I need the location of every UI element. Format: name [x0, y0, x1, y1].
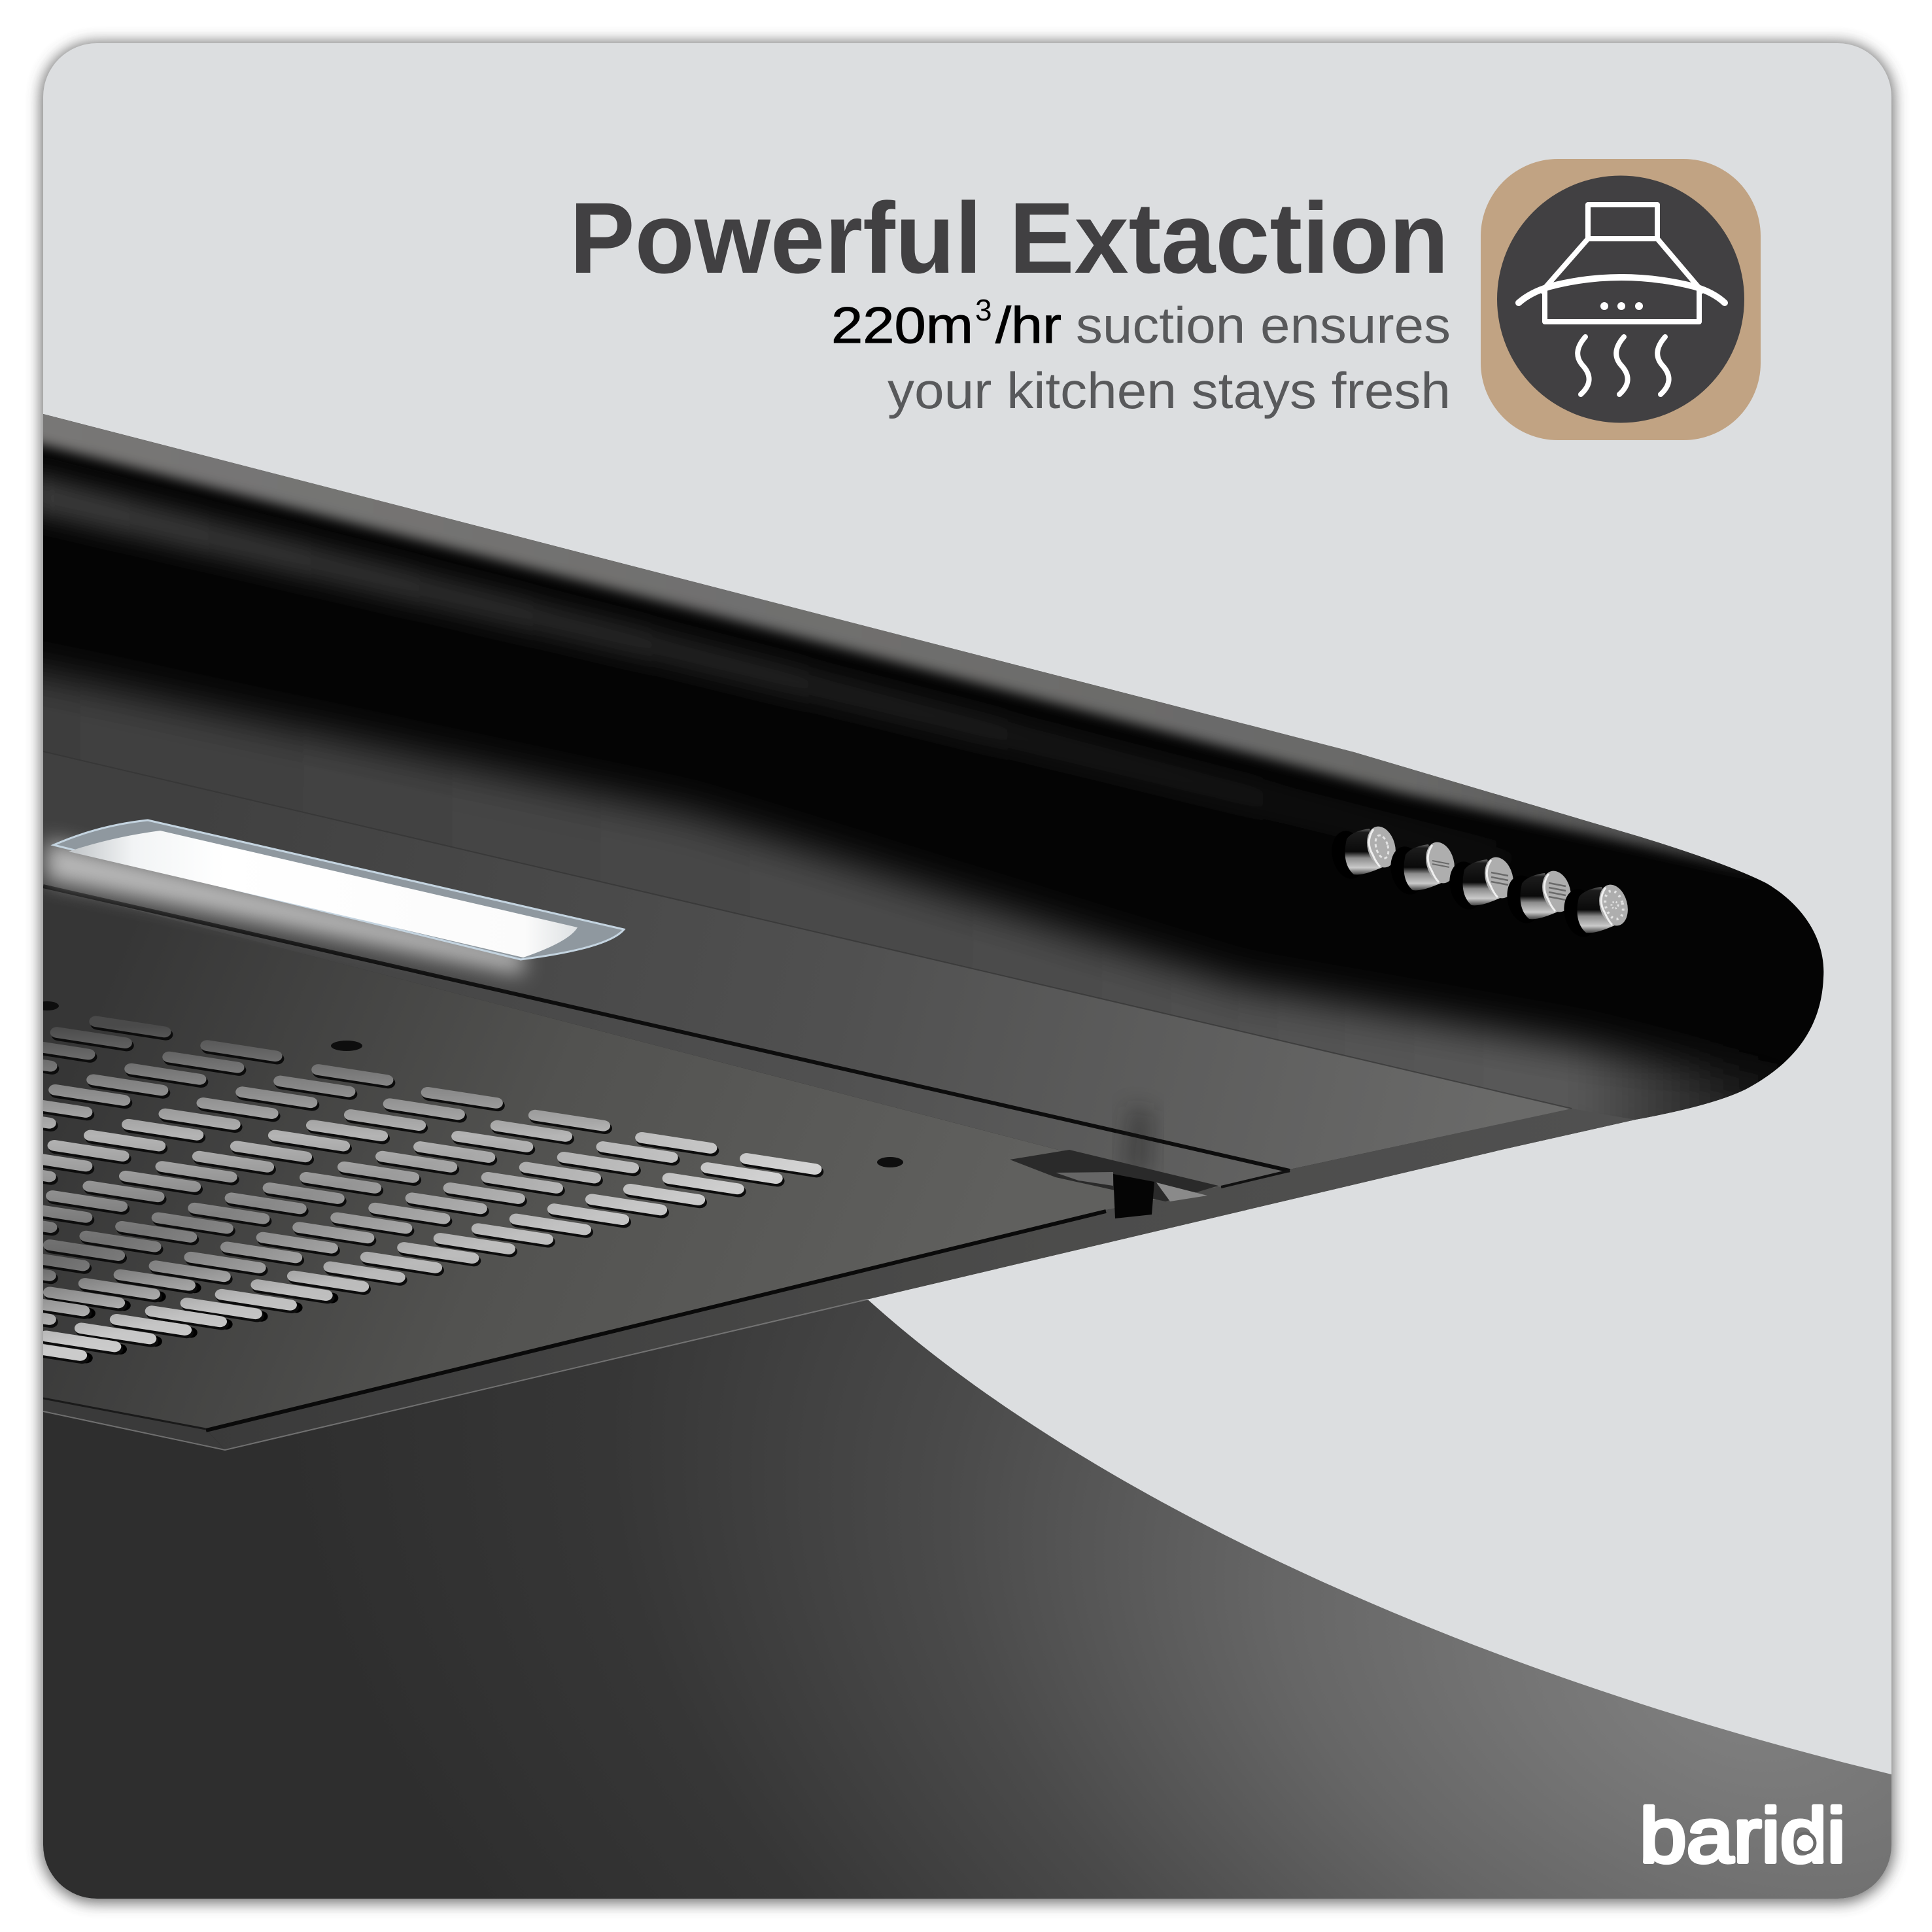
- subtitle line 2: your kitchen stays fresh: [888, 362, 1451, 419]
- subtitle line 1: [831, 293, 1451, 354]
- logo: baridi: baridi: [1640, 1793, 1846, 1879]
- vent slots: [0, 1022, 816, 1358]
- LED light panel: [54, 820, 624, 959]
- range hood product: [0, 392, 1823, 1450]
- knob 1: [1387, 839, 1459, 897]
- knob 0: [1328, 823, 1400, 882]
- front fascia soft light band: [0, 654, 1785, 1177]
- top rim highlight: [26, 392, 1766, 876]
- hood body silhouette: [43, 414, 1823, 1450]
- knob 3: [1503, 868, 1576, 926]
- subtitle line 1: 3: [975, 293, 992, 327]
- icon: hood outline: [1519, 205, 1725, 394]
- icon: range hood badge: [1481, 159, 1761, 440]
- screw holes: [35, 1001, 903, 1167]
- knob light: [1560, 882, 1632, 940]
- vent plate: [43, 886, 1216, 1429]
- icon: steam: [1578, 337, 1669, 394]
- subtitle line 1: /hr: [995, 296, 1061, 354]
- front plate with light: [212, 930, 1570, 1187]
- LED light glow: [46, 840, 523, 975]
- title: Powerful Extaction: [570, 182, 1449, 294]
- dark curved floor shape: [43, 1300, 1891, 1899]
- upper sheen: [43, 464, 1263, 807]
- lower lip: [206, 1109, 1635, 1450]
- left corner fold: [43, 1398, 225, 1450]
- seam lines: [43, 751, 1572, 1450]
- control knobs: [1328, 823, 1632, 940]
- shadow above clip: [1122, 1105, 1154, 1177]
- subtitle line 1: suction ensures: [1076, 296, 1451, 354]
- knob 2: [1445, 854, 1518, 912]
- filter clip and notch: [1010, 1150, 1218, 1218]
- subtitle line 1: 220m: [831, 296, 973, 354]
